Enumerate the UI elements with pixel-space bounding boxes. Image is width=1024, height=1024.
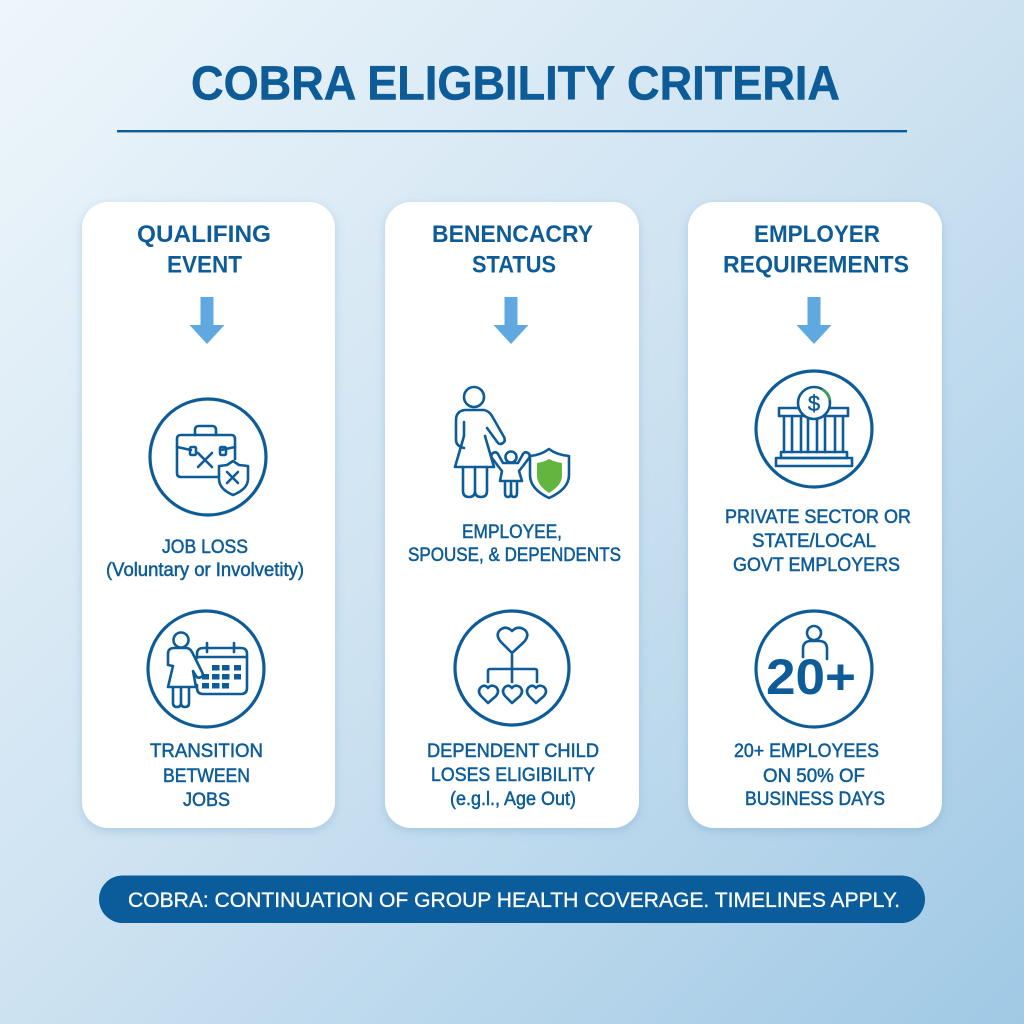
arrow [494,297,528,344]
icon: government building with dollar: $ [808,391,820,416]
card background [385,202,639,828]
card background [82,202,335,828]
title: COBRA ELIGBILITY CRITERIA [191,58,840,110]
icon: person with calendar [148,611,264,727]
text: transition between jobs: TRANSITION [150,741,263,762]
heading: BENENCACRY [432,221,593,248]
text: 20+ employees: ON 50% OF [763,766,865,787]
heading: REQUIREMENTS [723,252,909,278]
heading [137,221,271,278]
text: private sector: GOVT EMPLOYERS [733,555,900,576]
text: dependent child [427,741,599,810]
text: dependent child: (e.g.l., Age Out) [450,789,576,810]
icon: government building with dollar [756,371,872,487]
icon: parent, child and shield [455,387,569,498]
heading: EVENT [167,252,242,278]
text: dependent child: LOSES ELIGIBILITY [431,765,595,786]
heading: QUALIFING [137,221,271,248]
heading: STATUS [472,252,556,278]
text: transition between jobs: BETWEEN [163,766,250,787]
arrow [190,297,224,344]
panel: employer requirements [688,202,942,828]
text: dependent child: DEPENDENT CHILD [427,741,599,762]
footer banner [99,876,925,923]
heading: EMPLOYER [754,221,880,248]
text: private sector [725,507,911,576]
text: employee spouse dependents: SPOUSE, & DEPENDENTS [408,545,621,566]
icon: hearts hierarchy [455,611,569,725]
text: employee spouse dependents: EMPLOYEE, [462,522,562,543]
text: 20+ employees: 20+ EMPLOYEES [734,741,879,762]
text: employee spouse dependents [408,522,621,566]
text: job loss [106,537,304,581]
heading [432,221,593,278]
text: job loss: (Voluntary or Involvetity) [106,560,304,581]
card background [688,202,942,828]
title rule [117,130,907,132]
text: 20+ employees [734,741,885,810]
text: private sector: STATE/LOCAL [752,531,876,552]
icon: 20+ employees: 20+ [766,649,856,705]
footer banner: COBRA: CONTINUATION OF GROUP HEALTH COVERAGE. TIMELINES APPLY. [128,888,900,912]
text: job loss: JOB LOSS [162,537,248,558]
text: private sector: PRIVATE SECTOR OR [725,507,911,528]
text: transition between jobs [150,741,263,811]
panel: beneficiary status [385,202,639,828]
arrow [796,297,832,344]
icon: 20+ employees [756,611,872,727]
panel: qualifying event [82,202,335,828]
heading [723,221,909,278]
text: transition between jobs: JOBS [183,790,230,811]
icon: briefcase with shield [150,399,266,515]
text: 20+ employees: BUSINESS DAYS [745,789,885,810]
